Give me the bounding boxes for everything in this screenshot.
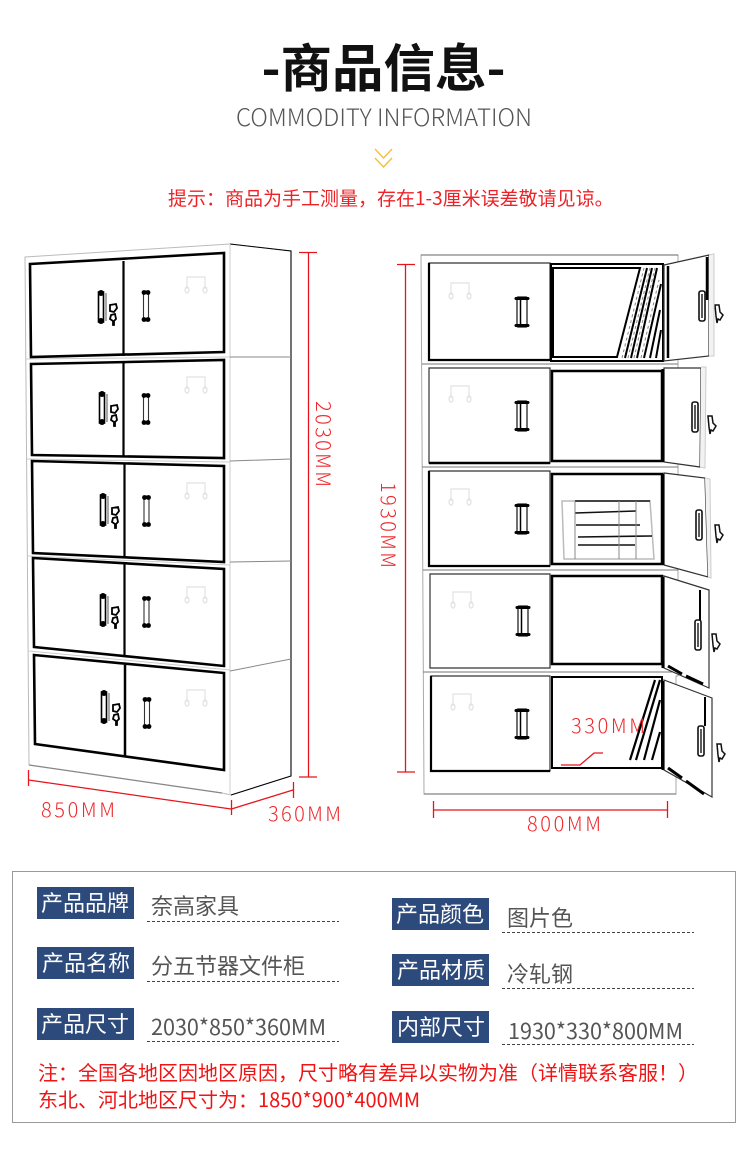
- row 5 open compartment with files: [552, 677, 662, 768]
- spec: size: 产品尺寸: [41, 1007, 129, 1039]
- spec: name: 分五节器文件柜: [151, 949, 305, 981]
- row 2 open door: [663, 367, 716, 468]
- row 5 open door: [663, 680, 725, 797]
- dimension: inner width 800MM: 800MM: [527, 808, 601, 837]
- right cabinet drawing: [421, 254, 725, 797]
- dimension: inner height 1930MM: [375, 264, 415, 772]
- row 2 open compartment: [552, 371, 662, 461]
- row 1 open compartment with files: [551, 264, 663, 361]
- doors row 5: [34, 655, 224, 770]
- spec: internal size: [392, 1010, 694, 1046]
- doors row 4: [33, 558, 224, 666]
- left cabinet drawing: [25, 244, 291, 795]
- dimension: width 850MM: [28, 770, 232, 823]
- row 1 open door: [664, 254, 723, 361]
- row 3 left door: [429, 471, 550, 566]
- dimension: depth 360MM: [232, 782, 341, 827]
- spec: colour: 图片色: [507, 901, 573, 933]
- dimension: inner depth 330MM: [561, 710, 645, 765]
- subtitle: COMMODITY INFORMATION: [236, 98, 532, 133]
- spec: name: [37, 946, 339, 982]
- title: -商品信息-: [261, 27, 506, 102]
- cabinet body: [25, 244, 291, 795]
- spec: size: [37, 1007, 339, 1042]
- spec: material: 冷轧钢: [507, 957, 573, 989]
- dimension: inner depth 330MM: 330MM: [571, 710, 645, 739]
- spec: brand: 产品品牌: [41, 886, 129, 918]
- spec: internal size: 1930*330*800MM: [508, 1014, 683, 1046]
- row 1 left door: [429, 263, 550, 360]
- spec: brand: 奈高家具: [151, 889, 239, 921]
- doors row 1: [30, 253, 224, 357]
- panel: product specifications: [12, 872, 736, 1122]
- note: 东北、河北地区尺寸为：1850*900*400MM: [38, 1084, 420, 1113]
- dimension: width 850MM: 850MM: [41, 794, 115, 823]
- icon: double chevron: [375, 149, 392, 167]
- cabinet body: [421, 255, 678, 794]
- dimension: depth 360MM: 360MM: [268, 798, 341, 827]
- note: 注：全国各地区因地区原因，尺寸略有差异以实物为准（详情联系客服！）: [38, 1057, 698, 1086]
- spec: internal size: 内部尺寸: [397, 1010, 485, 1042]
- row 3 open compartment with stacked files: [552, 474, 662, 564]
- row 4 open door: [663, 576, 720, 688]
- spec: name: 产品名称: [42, 946, 130, 978]
- spec: size: 2030*850*360MM: [151, 1010, 326, 1042]
- spec: colour: 产品颜色: [396, 897, 484, 929]
- row 4 left door: [430, 574, 550, 668]
- dimension: height 2030MM: [299, 252, 339, 777]
- dimension: inner width 800MM: [434, 801, 668, 837]
- spec: material: [392, 953, 694, 989]
- dimension: height 2030MM: 2030MM: [310, 401, 339, 487]
- doors row 2: [31, 360, 224, 458]
- row 3 open door: [663, 473, 723, 578]
- measurement hint: 提示：商品为手工测量，存在1-3厘米误差敬请见谅。: [168, 184, 614, 211]
- spec: brand: [37, 886, 339, 922]
- note: [38, 1057, 698, 1113]
- doors row 3: [32, 461, 224, 562]
- spec: material: 产品材质: [397, 953, 485, 985]
- row 4 open compartment: [552, 576, 662, 664]
- row 2 left door: [429, 368, 550, 463]
- spec: colour: [392, 897, 694, 933]
- dimension: inner height 1930MM: 1930MM: [375, 482, 404, 568]
- row 5 left door: [431, 676, 550, 771]
